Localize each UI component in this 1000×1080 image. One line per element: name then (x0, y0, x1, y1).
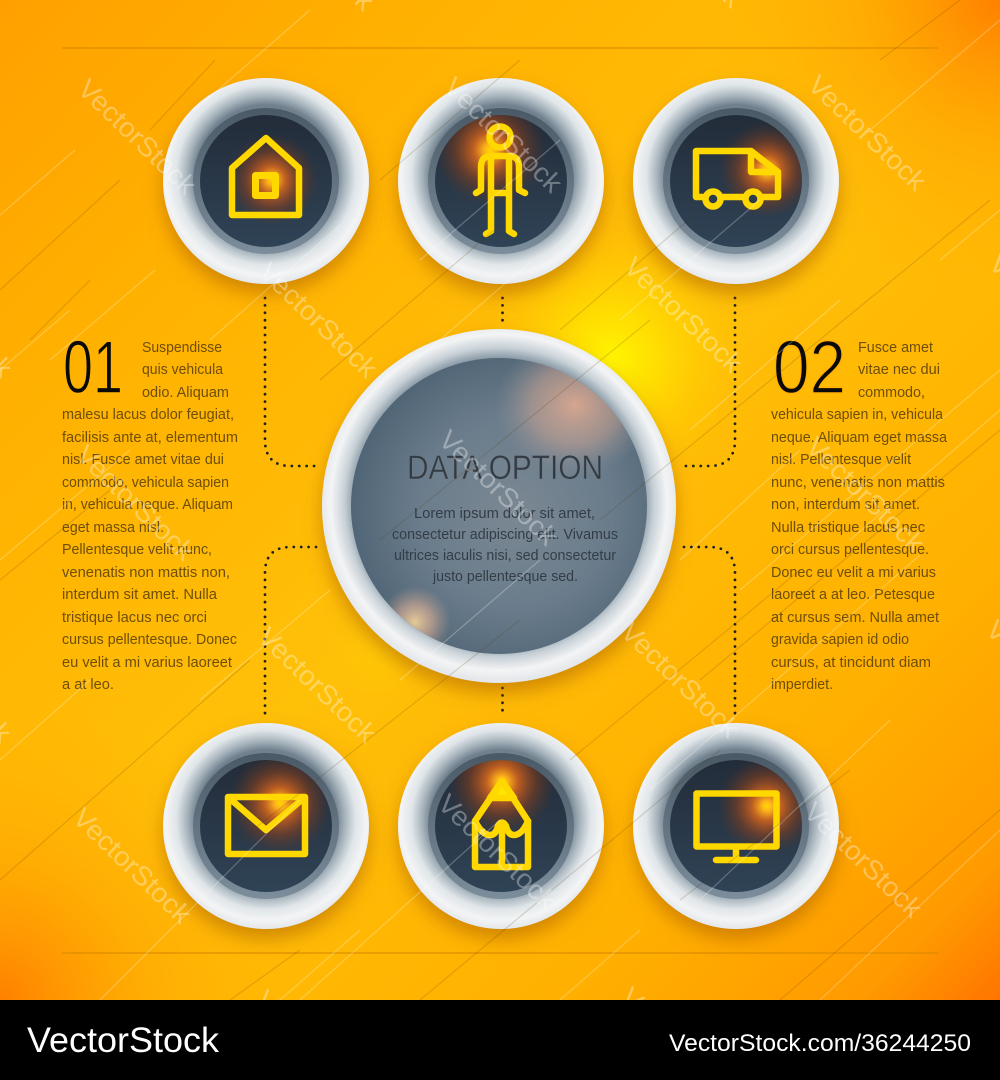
text block: left column: venenatis non mattis non, (62, 564, 230, 581)
section number 01: 01 (63, 325, 123, 409)
text block: right column: at cursus sem. Nulla amet (771, 609, 940, 626)
heading: DATA OPTION (407, 449, 603, 487)
footer image id: VectorStock.com/36244250 (669, 1030, 971, 1057)
text block: left column: commodo, vehicula sapien (62, 474, 229, 491)
text block: right column: cursus, at tincidunt diam (771, 654, 931, 671)
icon: truck (696, 151, 778, 206)
watermarks: VectorStock (438, 71, 568, 199)
watermarks: VectorStock (252, 621, 382, 749)
connector: top-left dotted (265, 298, 316, 466)
text block: left column: quis vehicula (142, 361, 224, 378)
text block: left column: odio. Aliquam (142, 384, 229, 401)
text block: left column (62, 339, 238, 693)
connector: top-center dotted (501, 298, 504, 325)
text block: right column: neque. Aliquam eget massa (771, 429, 948, 446)
watermarks: VectorStock (615, 616, 745, 744)
text block: left column: in, vehicula neque. Aliquam (62, 496, 233, 513)
icon: envelope (228, 797, 305, 854)
text block: left column: Suspendisse (142, 339, 222, 356)
watermarks: VectorStock (432, 788, 562, 916)
watermarks: VectorStock (70, 439, 200, 567)
text block: right column: vehicula sapien in, vehicula (771, 406, 944, 423)
text block: left column: interdum sit amet. Nulla (62, 586, 218, 603)
connector: bottom-center dotted (501, 688, 504, 716)
footer brand: VectorStock (27, 1021, 220, 1060)
text block: left column: eget massa nisl. (62, 519, 164, 536)
text block: right column: nisl. Pellentesque velit (771, 451, 912, 468)
text block: right column: laoreet a at leo. Petesque (771, 586, 935, 603)
text block: left column: nisl. Fusce amet vitae dui (62, 451, 224, 468)
badge: monitor (633, 723, 839, 929)
badge: pencil (398, 723, 604, 929)
icon: monitor (696, 794, 776, 860)
watermarks: VectorStock (67, 802, 197, 930)
text block: left column: a at leo. (62, 676, 114, 693)
section number 02: 02 (773, 325, 846, 409)
watermarks: VectorStock (253, 256, 383, 384)
text block: right column: commodo, (858, 384, 925, 401)
text block: left column: cursus pellentesque. Donec (62, 631, 237, 648)
central panel: data option (322, 329, 676, 683)
watermarks: VectorStock (798, 796, 928, 924)
text block: left column: eu velit a mi varius laoreet (62, 654, 233, 671)
connector: bottom-left dotted (265, 547, 316, 716)
watermarks: VectorStock (433, 424, 563, 552)
text block: right column: orci cursus pellentesque. (771, 541, 929, 558)
footer bar (0, 1000, 1000, 1080)
text block: right column (771, 339, 948, 693)
badge: mail (163, 723, 369, 929)
badge: home (163, 78, 369, 284)
icon: person (476, 126, 525, 234)
central body text: ultrices iaculis nisi, sed consectetur (394, 547, 616, 564)
watermarks: VectorStock (618, 251, 748, 379)
central body text: Lorem ipsum dolor sit amet, (414, 505, 595, 522)
text block: left column: facilisis ante at, elementum (62, 429, 238, 446)
badge: delivery truck (633, 78, 839, 284)
text block: right column: Nulla tristique lacus nec (771, 519, 925, 536)
icon: pencil (475, 781, 528, 867)
text block: right column: Fusce amet (858, 339, 934, 356)
watermarks: VectorStock (802, 69, 932, 197)
text block: right column: gravida sapien id odio (771, 631, 909, 648)
connector: bottom-right dotted (684, 547, 735, 716)
text block: left column: tristique lacus nec orci (62, 609, 207, 626)
central body text: consectetur adipiscing elit. Vivamus (392, 526, 618, 543)
text block: right column: vitae nec dui (858, 361, 940, 378)
text block: right column: Donec eu velit a mi varius (771, 564, 936, 581)
text block: left column: malesu lacus dolor feugiat, (62, 406, 234, 423)
central body text: justo pellentesque sed. (432, 568, 578, 585)
text block: right column: nunc, venenatis non mattis (771, 474, 945, 491)
icon: house (232, 138, 299, 215)
text block: right column: non, interdum sit amet. (771, 496, 920, 513)
watermarks: VectorStock (800, 431, 930, 559)
watermarks: VectorStock (72, 73, 202, 201)
badge: person (398, 78, 604, 284)
text block: left column: Pellentesque velit nunc, (62, 541, 212, 558)
horizontal rules (62, 48, 938, 953)
text block: right column: imperdiet. (771, 676, 833, 693)
connector: top-right dotted (684, 298, 735, 466)
central body text (392, 505, 618, 585)
